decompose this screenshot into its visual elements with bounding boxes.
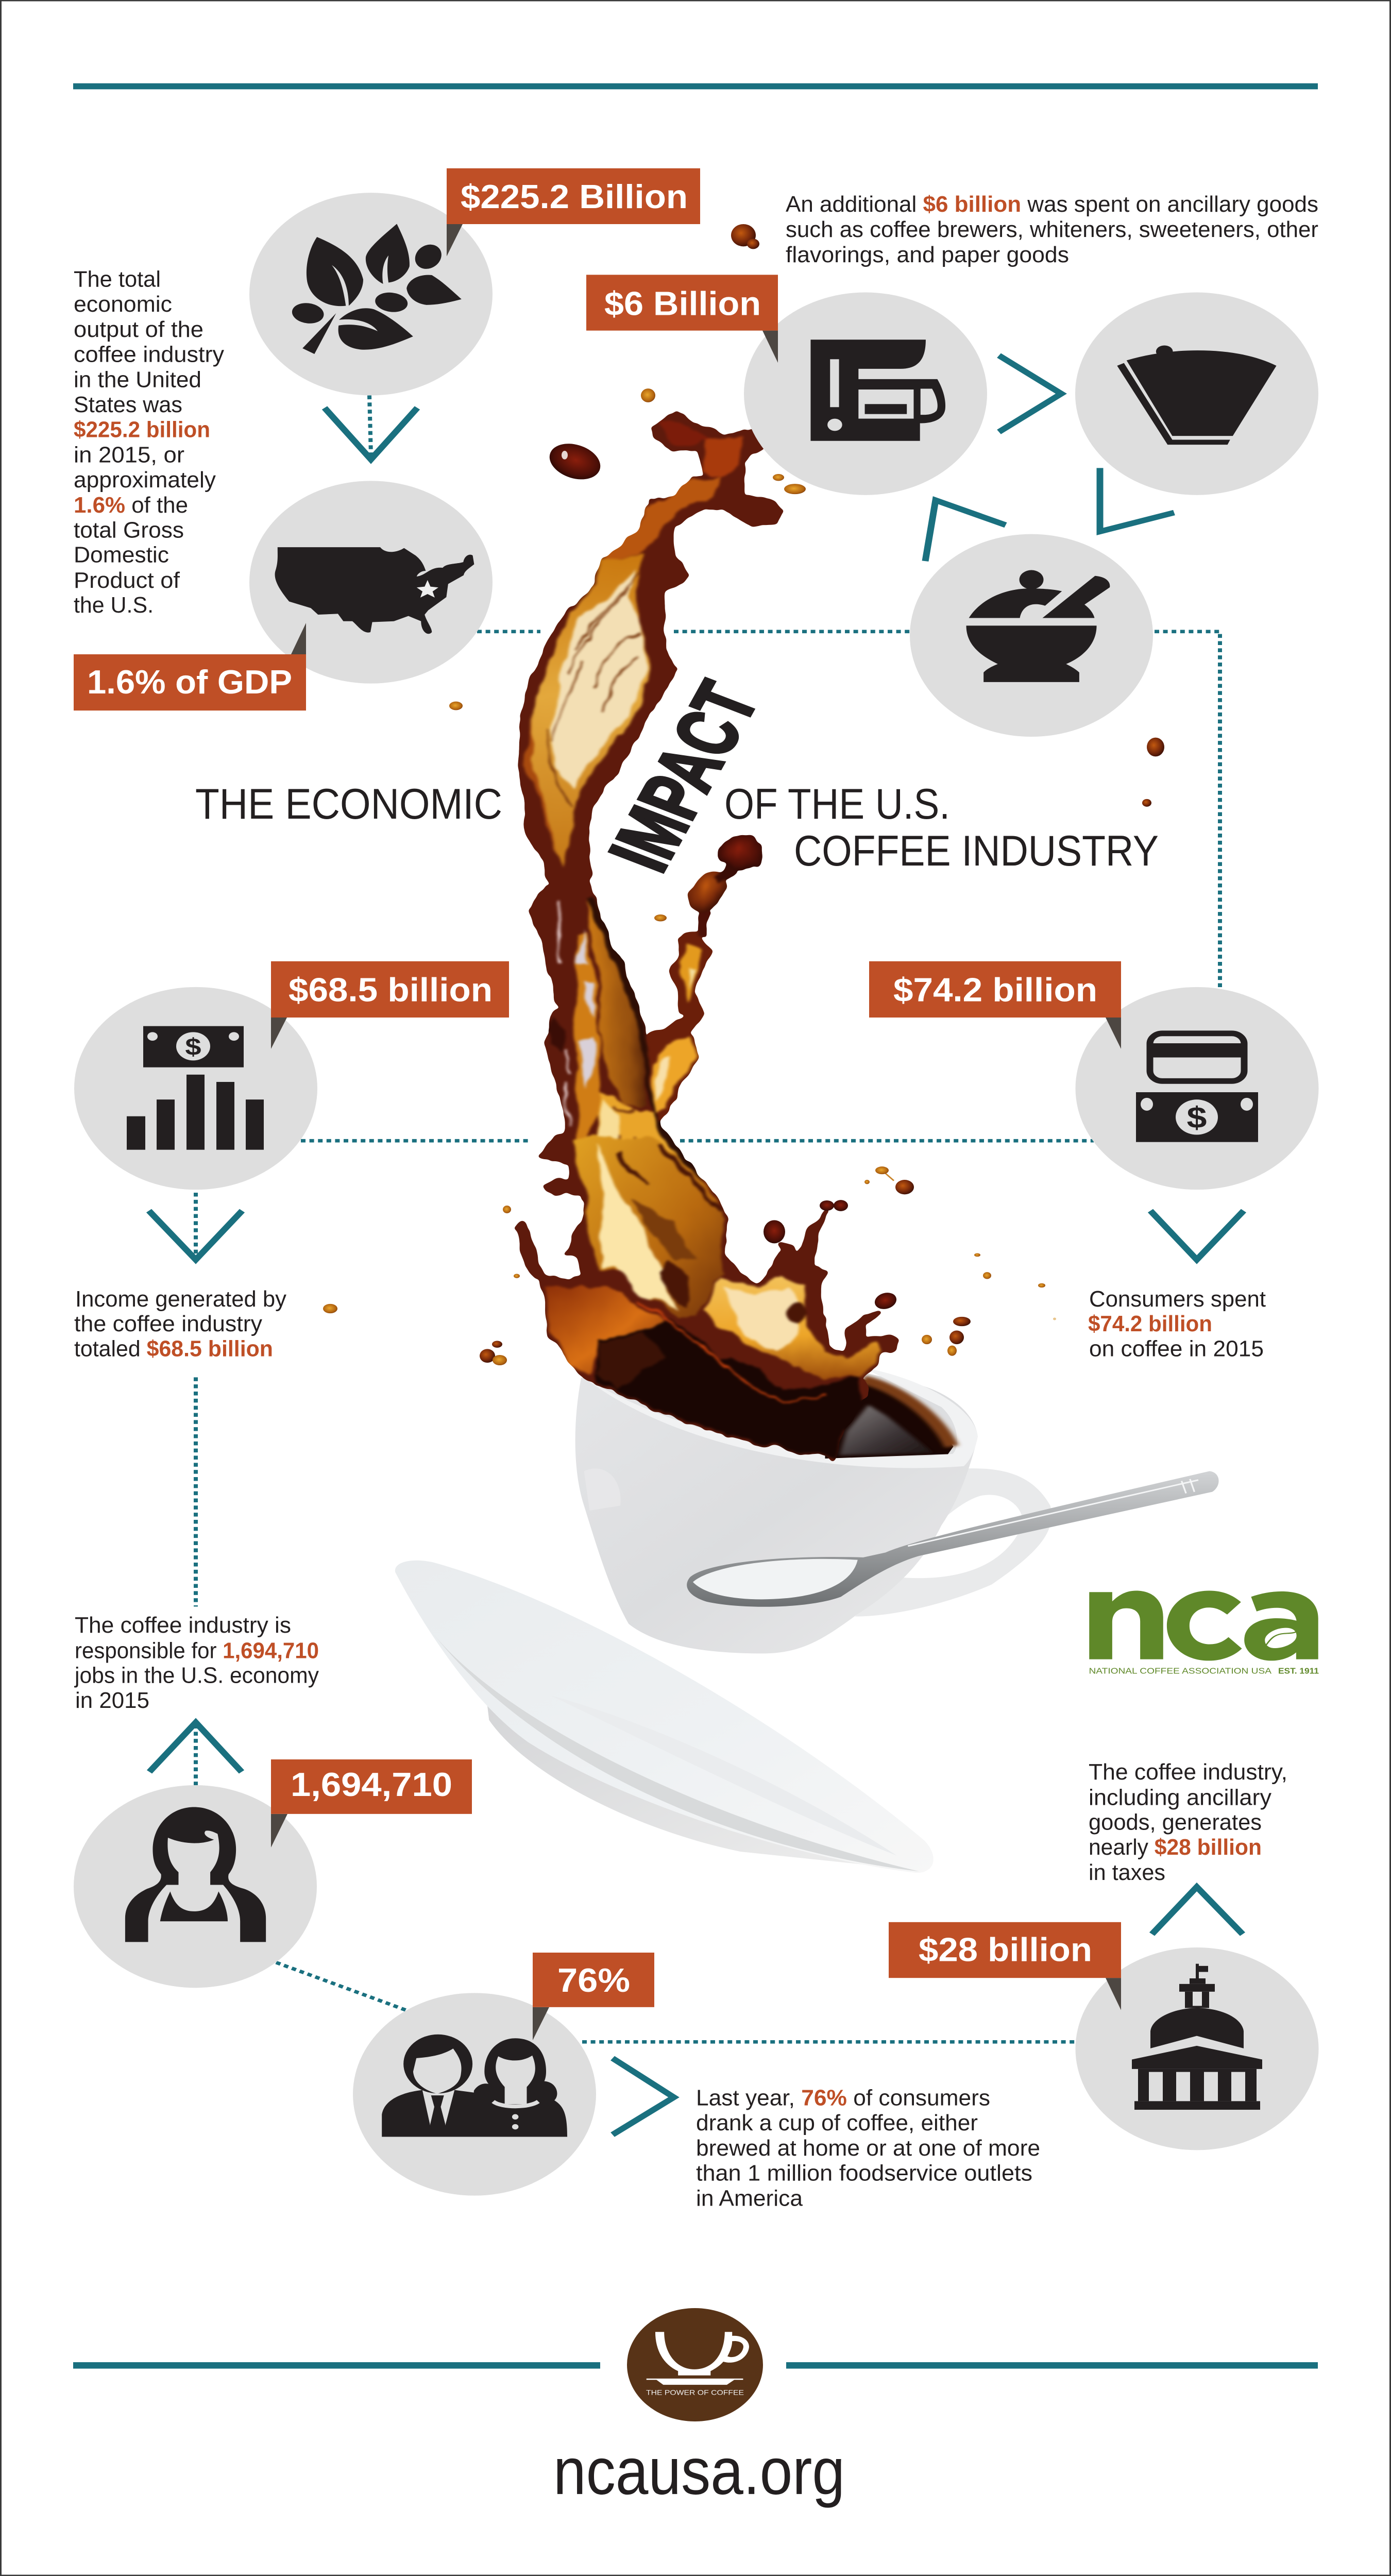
text: jobs	[74, 1613, 319, 1713]
text: consumers spent: $74.2 billion	[1088, 1312, 1212, 1336]
text: income: the coffee industry	[74, 1312, 262, 1336]
text: total economic output: in the United	[74, 368, 201, 393]
text: total economic output: States was	[74, 393, 182, 417]
title: IMPACT	[592, 671, 776, 882]
circle 8: barista icon	[74, 1785, 317, 1988]
logo: National Coffee Association	[1089, 1590, 1319, 1675]
illustration: saucer	[395, 1561, 934, 1873]
logo: National Coffee Association: EST. 1911	[1278, 1667, 1319, 1675]
splash: side finger	[650, 836, 759, 1120]
top rule	[73, 83, 1318, 89]
title: OF THE U.S.	[724, 780, 950, 828]
text: consumers spent	[1088, 1287, 1266, 1361]
text: consumers spent: on coffee in 2015	[1089, 1336, 1264, 1361]
callout: $28 billion: $28 billion	[919, 1931, 1092, 1969]
circle 3: coffee brewer icon	[744, 293, 987, 495]
footer rules	[73, 2362, 1318, 2369]
title: THE ECONOMIC	[195, 780, 502, 828]
circle 10: capitol icon	[1076, 1947, 1319, 2150]
text: total economic output: the U.S.	[74, 593, 154, 618]
chevron arrows	[149, 355, 1244, 2134]
circle 7: credit card and cash icon: $	[1187, 1101, 1207, 1134]
text: total economic output: coffee industry	[74, 342, 224, 367]
text: taxes: goods, generates	[1089, 1810, 1262, 1835]
callout: $28 billion	[889, 1922, 1121, 2010]
text: total economic output: output of the	[74, 317, 203, 342]
text: total economic output: in 2015, or	[74, 443, 184, 467]
callout: $6 Billion	[586, 275, 778, 363]
text: total economic output: $225.2 billion	[74, 417, 210, 442]
text: consumers 76%: brewed at home or at one of more	[696, 2136, 1040, 2161]
text: jobs: jobs in the U.S. economy	[74, 1664, 319, 1688]
text: income	[74, 1287, 286, 1361]
splash: lower crown	[545, 1138, 883, 1458]
callout: 76%	[533, 1953, 654, 2040]
illustration: spoon	[687, 1471, 1219, 1607]
text: consumers 76%	[696, 2086, 1040, 2211]
callout: $68.5 billion: $68.5 billion	[289, 971, 493, 1009]
callout: 1,694,710	[271, 1759, 472, 1848]
callout: $225.2 Billion	[447, 168, 700, 257]
text: ancillary goods: flavorings, and paper goods	[786, 243, 1069, 267]
text: total economic output	[74, 267, 224, 618]
text: taxes	[1089, 1760, 1287, 1885]
text: total economic output: The total	[74, 267, 161, 292]
splash: central stream	[547, 897, 716, 1202]
callout: $6 Billion: $6 Billion	[604, 285, 761, 323]
circle 2: U.S. map icon	[249, 481, 493, 684]
badge: The Power of Coffee	[627, 2308, 763, 2421]
text: taxes: in taxes	[1089, 1860, 1165, 1885]
circle 5: mortar and pestle icon	[910, 534, 1153, 737]
badge: The Power of Coffee: THE POWER OF COFFEE	[646, 2389, 744, 2397]
illustration: coffee splash	[514, 413, 899, 1458]
coffee droplets	[323, 224, 1164, 1365]
text: total economic output: Domestic	[74, 543, 169, 568]
text: total economic output: total Gross	[74, 518, 184, 543]
circle 4: paper filter icon	[1075, 293, 1318, 495]
title	[195, 671, 1159, 882]
illustration: coffee cup	[575, 1368, 1051, 1653]
callout: 1,694,710: 1,694,710	[291, 1766, 452, 1803]
text: consumers 76%: in America	[696, 2187, 803, 2211]
text: taxes: nearly $28 billion	[1089, 1835, 1262, 1860]
text: ancillary goods	[786, 192, 1318, 267]
text: taxes: including ancillary	[1089, 1785, 1271, 1810]
splash: upper sheet	[526, 420, 747, 869]
circle 1: leaves icon	[249, 193, 493, 396]
circle 6: money and bar chart icon	[74, 987, 317, 1190]
text: consumers spent: Consumers spent	[1089, 1287, 1266, 1312]
text: jobs: The coffee industry is	[75, 1613, 291, 1638]
callout: $74.2 billion: $74.2 billion	[893, 971, 1097, 1009]
text: consumers 76%: Last year, 76% of consumers	[696, 2086, 990, 2111]
callout: 1.6% of GDP	[74, 623, 306, 710]
illustration: coffee in the cup	[825, 1377, 954, 1459]
text: jobs: responsible for 1,694,710	[75, 1638, 319, 1663]
text: taxes: The coffee industry,	[1089, 1760, 1287, 1785]
text: total economic output: economic	[74, 292, 172, 317]
text: income: Income generated by	[75, 1287, 286, 1312]
title: COFFEE INDUSTRY	[794, 827, 1159, 875]
callout: 1.6% of GDP: 1.6% of GDP	[87, 664, 292, 701]
text: consumers 76%: drank a cup of coffee, either	[696, 2111, 978, 2136]
text: total economic output: approximately	[74, 468, 216, 493]
text: total economic output: 1.6% of the	[74, 493, 188, 518]
circle 6: money and bar chart icon: $	[185, 1033, 201, 1060]
logo: National Coffee Association: NATIONAL COFFEE ASSOCIATION USA	[1089, 1667, 1272, 1675]
callout: $74.2 billion	[869, 961, 1121, 1049]
text: consumers 76%: than 1 million foodservice outlets	[696, 2161, 1032, 2185]
callout: $68.5 billion	[271, 961, 509, 1049]
text: jobs: in 2015	[75, 1688, 149, 1713]
circle 9: two consumers icon	[353, 1993, 596, 2196]
dotted connectors	[196, 396, 1220, 2042]
callout: $225.2 Billion: $225.2 Billion	[461, 178, 688, 216]
website: ncausa.org	[553, 2435, 845, 2509]
text: total economic output: Product of	[74, 568, 180, 593]
circle 7: credit card and cash icon	[1076, 987, 1319, 1190]
text: income: totaled $68.5 billion	[74, 1336, 273, 1361]
callout: 76%: 76%	[557, 1962, 630, 1999]
text: ancillary goods: An additional $6 billion was spent on ancillary goods	[786, 192, 1318, 217]
